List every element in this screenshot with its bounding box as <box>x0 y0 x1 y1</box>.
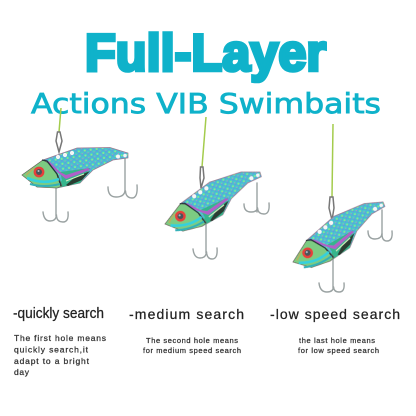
subtitle: Actions VIB Swimbaits: Actions VIB Swimbaits <box>31 87 381 120</box>
heading: low speed search: -low speed search <box>270 306 400 322</box>
description: second hole: for medium speed search <box>143 346 241 355</box>
lure 3: low speed search <box>283 124 396 292</box>
description: last hole <box>298 336 379 355</box>
title: Full-Layer: Full-Layer <box>85 24 326 82</box>
description: first hole: adapt to a bright <box>14 356 90 366</box>
description: second hole <box>143 336 241 355</box>
lure 1: quick search <box>22 108 137 222</box>
description: last hole: for low speed search <box>298 346 379 355</box>
heading: quickly search: -quickly search <box>13 305 104 322</box>
description: first hole: quickly search,it <box>14 344 89 354</box>
description: last hole: the last hole means <box>299 336 375 345</box>
description: first hole <box>14 333 106 377</box>
lure 2: medium search <box>157 117 270 259</box>
description: first hole: day <box>14 367 30 377</box>
heading: medium search: -medium search <box>129 306 244 322</box>
description: first hole: The first hole means <box>14 333 106 343</box>
description: second hole: The second hole means <box>146 336 238 345</box>
